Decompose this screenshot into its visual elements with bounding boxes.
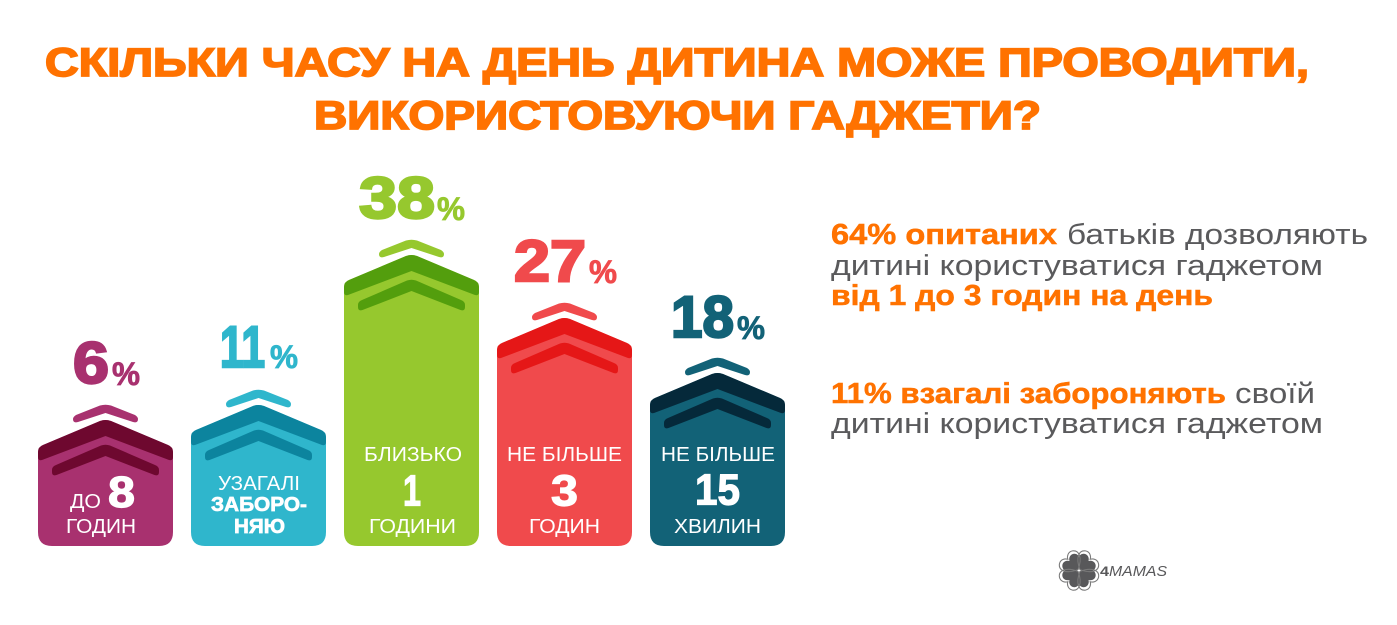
column shape xyxy=(38,405,173,546)
percentage 27%: 27 xyxy=(514,229,586,294)
column label xyxy=(661,444,775,538)
text block: 64% of parents: від 1 до 3 годин на день xyxy=(831,280,1213,312)
percentage 6% xyxy=(73,331,140,396)
column label: 15 xyxy=(695,466,740,514)
title: ВИКОРИСТОВУЮЧИ ГАДЖЕТИ? xyxy=(314,94,1041,138)
percentage 11%: 11 xyxy=(220,315,265,380)
column label: 8 xyxy=(108,468,135,517)
bar: 18% at most 15 minutes xyxy=(650,285,785,546)
percentage 18%: % xyxy=(737,310,765,346)
percentage 27% xyxy=(514,229,617,294)
column label: ДО xyxy=(70,491,101,513)
percentage 38% xyxy=(359,166,465,231)
column shape xyxy=(344,240,479,546)
column label: УЗАГАЛІ xyxy=(218,473,300,495)
text block: 64% of parents xyxy=(831,219,1368,312)
text block: 64% of parents: 64% опитаних xyxy=(831,219,1057,251)
percentage 38%: 38 xyxy=(359,166,435,231)
percentage 18% xyxy=(671,285,765,350)
column label: НЯЮ xyxy=(234,516,285,538)
title xyxy=(45,41,1309,138)
column label: ГОДИН xyxy=(66,516,136,538)
column label: НЕ БІЛЬШЕ xyxy=(507,444,622,466)
column label: НЕ БІЛЬШЕ xyxy=(661,444,775,466)
title: СКІЛЬКИ ЧАСУ НА ДЕНЬ ДИТИНА МОЖЕ ПРОВОДИТИ, xyxy=(45,41,1309,85)
bar: 38% about 1 hour xyxy=(344,166,479,546)
column label xyxy=(211,473,307,538)
text block: 64% of parents: батьків дозволяють xyxy=(1067,219,1368,251)
column label: БЛИЗЬКО xyxy=(364,444,462,466)
bar: 6% up to 8 hours xyxy=(38,331,173,546)
column label: ГОДИН xyxy=(529,516,600,538)
column label: ГОДИНИ xyxy=(369,516,456,538)
column label xyxy=(507,444,622,538)
column label xyxy=(66,468,136,538)
percentage 6%: 6 xyxy=(73,331,109,396)
bar: 11% forbid xyxy=(191,315,326,546)
text block: 11% forbid: 11% взагалі забороняють xyxy=(831,378,1226,410)
icon: clover xyxy=(1057,548,1101,593)
logo wordmark: MAMAS xyxy=(1109,563,1167,580)
column label xyxy=(364,444,462,538)
percentage 18%: 18 xyxy=(671,285,734,350)
column label: ЗАБОРО- xyxy=(211,494,307,516)
percentage 27%: % xyxy=(589,254,617,290)
logo wordmark: 4 xyxy=(1100,563,1109,579)
column shape xyxy=(650,358,785,546)
column label: 1 xyxy=(403,466,421,516)
column label: ХВИЛИН xyxy=(674,516,761,538)
percentage 6%: % xyxy=(112,356,140,392)
text block: 11% forbid: своїй xyxy=(1235,378,1315,410)
percentage 11%: % xyxy=(270,339,298,375)
column label: 3 xyxy=(551,466,578,516)
column shape xyxy=(191,390,326,546)
column shape xyxy=(497,303,632,546)
bar: 27% at most 3 hours xyxy=(497,229,632,546)
logo: 4MAMAS xyxy=(1057,548,1167,593)
text block: 11% forbid: дитині користуватися гаджетом xyxy=(831,408,1323,440)
text block: 64% of parents: дитині користуватися гаджетом xyxy=(831,250,1323,282)
text block: 11% forbid xyxy=(831,378,1323,440)
percentage 38%: % xyxy=(437,191,465,227)
